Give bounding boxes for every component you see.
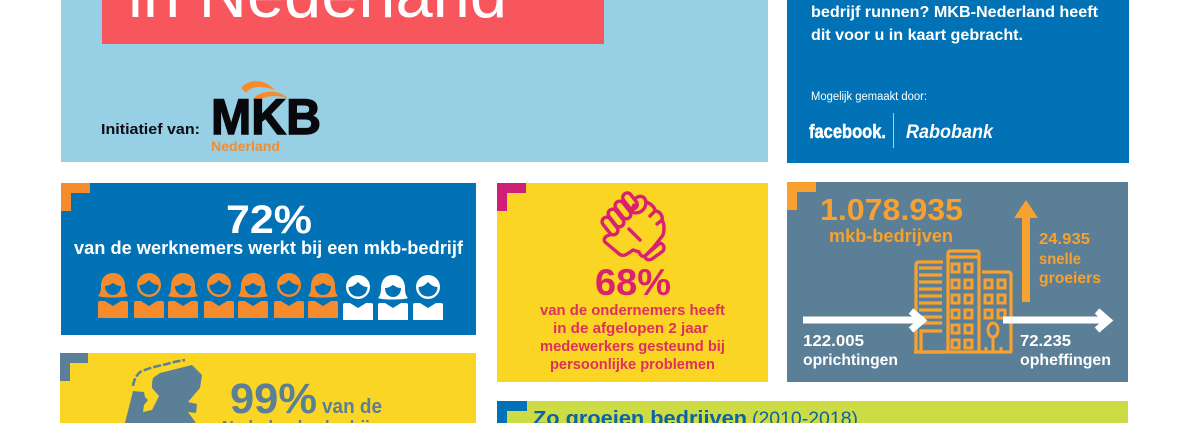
statistic: 99%: 99% — [230, 375, 317, 423]
pictogram: 10 people, 7 highlighted — [98, 273, 443, 320]
panel: 72% employees — [61, 183, 476, 335]
statistic caption — [540, 302, 725, 373]
statistic: 1.078.935: 1.078.935 — [820, 192, 963, 227]
statistic caption: persoonlijke problemen — [550, 356, 715, 373]
intro text: dit voor u in kaart gebracht. — [811, 27, 1023, 44]
initiative label: Initiatief van: — [101, 121, 200, 138]
statistic caption: van de — [322, 396, 382, 418]
logo: Rabobank: Rabobank — [906, 122, 994, 143]
startups label: oprichtingen — [803, 352, 898, 369]
statistic caption: in de afgelopen 2 jaar — [553, 320, 708, 337]
title banner — [102, 0, 604, 44]
fast growers label: 24.935 — [1039, 231, 1090, 248]
panel: introduction — [787, 0, 1129, 163]
arrow: in — [803, 311, 924, 330]
closures label — [1020, 333, 1111, 369]
startups label: 122.005 — [803, 333, 864, 350]
logo: MKB Nederland: MKB — [211, 89, 321, 145]
fast growers label — [1039, 231, 1101, 287]
panel: title block — [61, 0, 768, 162]
icon: map of the Netherlands — [125, 360, 202, 423]
statistic: 68%: 68% — [595, 262, 671, 303]
panel: 68% entrepreneurs — [497, 183, 768, 382]
statistic caption: medewerkers gesteund bij — [540, 338, 725, 355]
statistic caption: mkb-bedrijven — [829, 226, 953, 246]
closures label: opheffingen — [1020, 352, 1111, 369]
panel: 99% of businesses — [60, 353, 476, 423]
icon: buildings — [914, 251, 1012, 352]
logo: MKB Nederland: Nederland — [211, 139, 280, 154]
sponsors label: Mogelijk gemaakt door: — [811, 91, 927, 103]
panel: business growth — [497, 401, 1128, 423]
startups label — [803, 333, 898, 369]
arrow: up — [1014, 200, 1038, 302]
statistic caption: van de ondernemers heeft — [540, 302, 725, 319]
statistic: 72%: 72% — [226, 198, 312, 242]
statistic caption: van de werknemers werkt bij een mkb-bedrijf — [74, 238, 464, 258]
intro text — [811, 4, 1098, 44]
icon: clasped hands — [600, 191, 664, 260]
intro text: bedrijf runnen? MKB-Nederland heeft — [811, 4, 1098, 21]
logo: facebook: facebook. — [809, 122, 886, 143]
closures label: 72.235 — [1020, 333, 1071, 350]
statistic caption — [222, 396, 398, 423]
arrow: out — [1003, 311, 1109, 330]
fast growers label: groeiers — [1039, 270, 1101, 287]
panel: number of businesses — [787, 182, 1128, 382]
fast growers label: snelle — [1039, 251, 1081, 268]
